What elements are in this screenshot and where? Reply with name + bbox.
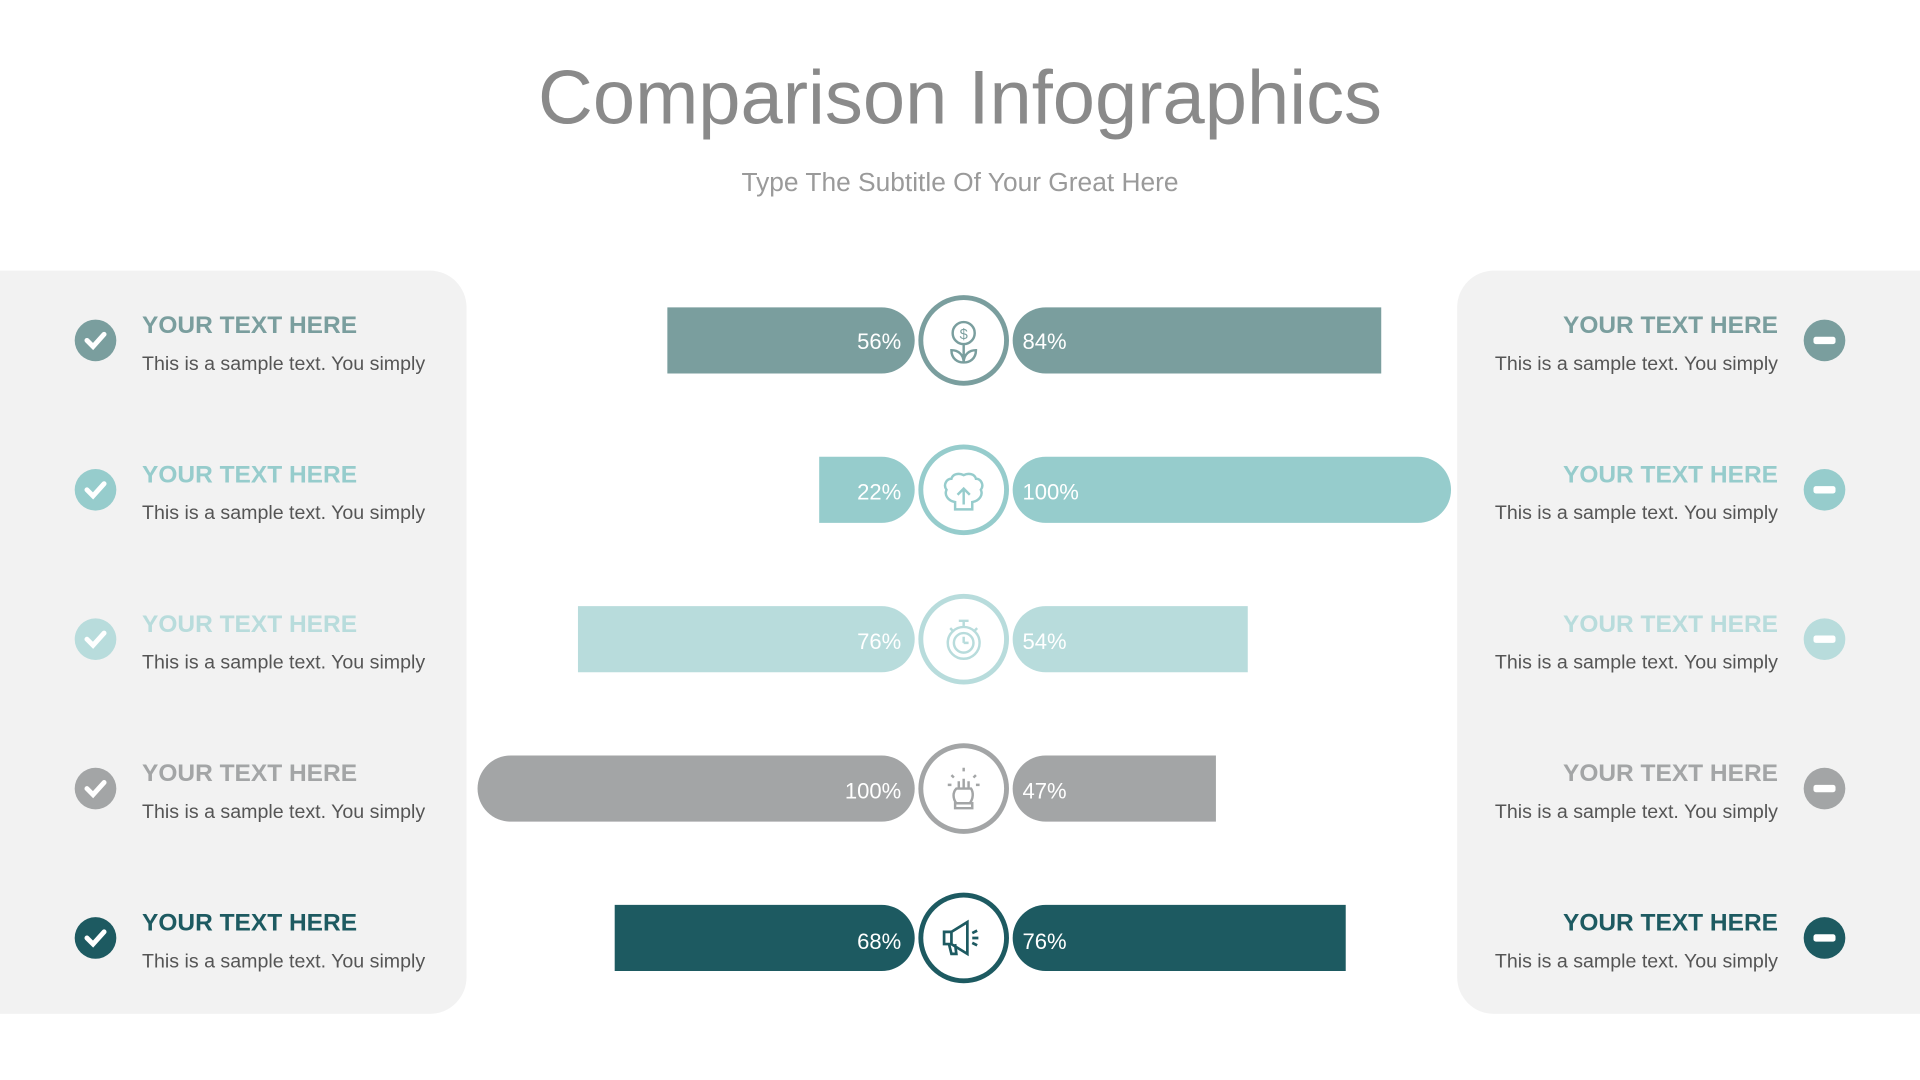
panel: left: YOUR TEXT HERE — [142, 611, 357, 638]
row 3: 76% — [857, 629, 901, 654]
item 2 — [1495, 462, 1846, 524]
item 3: This is a sample text. You simply — [142, 653, 425, 673]
row 3 — [578, 594, 1248, 684]
item 4: This is a sample text. You simply — [142, 802, 425, 823]
panel: right: YOUR TEXT HERE — [1563, 760, 1778, 787]
item 5 — [1495, 910, 1846, 972]
row 5: 76% — [1022, 929, 1067, 954]
item 3 — [74, 611, 426, 673]
panel: left: YOUR TEXT HERE — [142, 910, 357, 937]
panel: right: YOUR TEXT HERE — [1563, 312, 1778, 339]
item 4: This is a sample text. You simply — [1495, 802, 1778, 823]
row 4: 47% — [1022, 778, 1067, 803]
panel: left: YOUR TEXT HERE — [142, 760, 357, 787]
row 2: 22% — [857, 480, 901, 505]
item 2 — [74, 462, 426, 524]
item 1 — [1495, 312, 1846, 375]
row 1: 56% — [857, 329, 901, 354]
item 4 — [74, 760, 426, 823]
row 1: 84% — [1022, 329, 1067, 354]
item 5 — [74, 910, 426, 972]
item 5: This is a sample text. You simply — [1495, 951, 1778, 972]
item 3 — [1495, 611, 1846, 673]
item 1: This is a sample text. You simply — [1495, 354, 1778, 375]
panel: right: YOUR TEXT HERE — [1563, 611, 1778, 638]
row 4: 100% — [845, 778, 901, 803]
item 1 — [74, 312, 426, 375]
panel: left: YOUR TEXT HERE — [142, 462, 357, 489]
item 3: This is a sample text. You simply — [1495, 653, 1778, 673]
item 2: This is a sample text. You simply — [1495, 503, 1778, 524]
row 2 — [819, 444, 1451, 535]
item 5: This is a sample text. You simply — [142, 951, 425, 972]
panel: left: YOUR TEXT HERE — [142, 312, 357, 339]
subtitle: Type The Subtitle Of Your Great Here — [741, 168, 1179, 197]
row 5 — [615, 893, 1346, 983]
item 4 — [1495, 760, 1846, 823]
item 2: This is a sample text. You simply — [142, 503, 425, 524]
item 1: This is a sample text. You simply — [142, 354, 425, 375]
row 5: 68% — [857, 929, 901, 954]
row 1 — [667, 295, 1381, 386]
row 3: 54% — [1022, 629, 1067, 654]
panel: right — [1457, 271, 1920, 1014]
panel: right: YOUR TEXT HERE — [1563, 910, 1778, 937]
row 1: $ — [960, 327, 968, 343]
panel: left — [0, 271, 467, 1014]
panel: right: YOUR TEXT HERE — [1563, 462, 1778, 489]
row 4 — [478, 743, 1216, 834]
title: Comparison Infographics — [538, 56, 1382, 141]
row 2: 100% — [1022, 480, 1079, 505]
